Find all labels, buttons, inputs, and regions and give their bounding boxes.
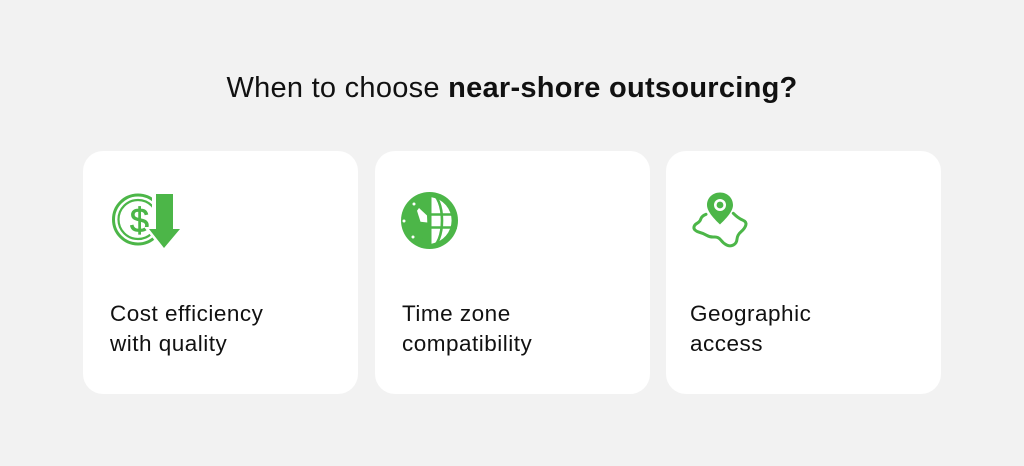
label: cost efficiency with quality: Cost efficiency bbox=[110, 301, 263, 326]
label: geographic access bbox=[690, 301, 811, 356]
icon: coin with down arrow bbox=[112, 194, 180, 248]
panel: cost efficiency bbox=[83, 151, 358, 394]
icon: coin with down arrow: $ bbox=[130, 202, 149, 240]
label: cost efficiency with quality bbox=[110, 301, 263, 356]
label: geographic access: Geographic bbox=[690, 301, 811, 326]
label: time zone compatibility bbox=[402, 301, 532, 356]
icon: globe with clock bbox=[401, 192, 458, 249]
label: cost efficiency with quality: with quality bbox=[110, 331, 227, 356]
label: time zone compatibility: Time zone bbox=[402, 301, 511, 326]
icon: map with location pin bbox=[692, 192, 748, 248]
label: geographic access: access bbox=[690, 331, 763, 356]
panel: geographic access bbox=[666, 151, 941, 394]
label: time zone compatibility: compatibility bbox=[402, 331, 532, 356]
title: When to choose near-shore outsourcing? bbox=[226, 72, 798, 104]
panel: time zone bbox=[375, 151, 650, 394]
